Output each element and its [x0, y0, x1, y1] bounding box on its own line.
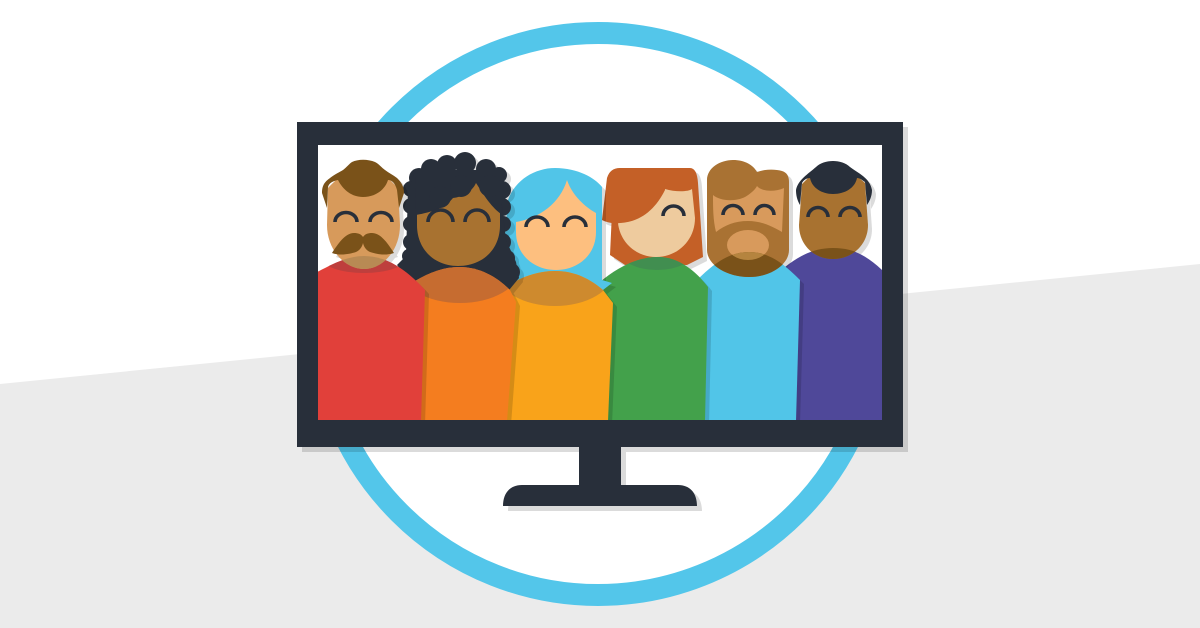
person 6: purple sweater [786, 161, 882, 420]
screen [318, 145, 882, 420]
background slanted band [0, 264, 1200, 628]
person 2: orange sweater, curly hair [397, 152, 520, 421]
monitor shadow [302, 127, 908, 452]
person 4: green sweater, red hair [590, 168, 708, 421]
person 5: blue sweater, beard [700, 160, 804, 420]
monitor frame [297, 122, 903, 447]
person 3: yellow sweater, blue hair [490, 168, 613, 421]
monitor [297, 122, 908, 506]
person 1: red sweater, mustache [310, 160, 425, 421]
blue circle [317, 33, 879, 595]
monitor stand [503, 447, 697, 506]
group of people on screen [310, 152, 890, 421]
